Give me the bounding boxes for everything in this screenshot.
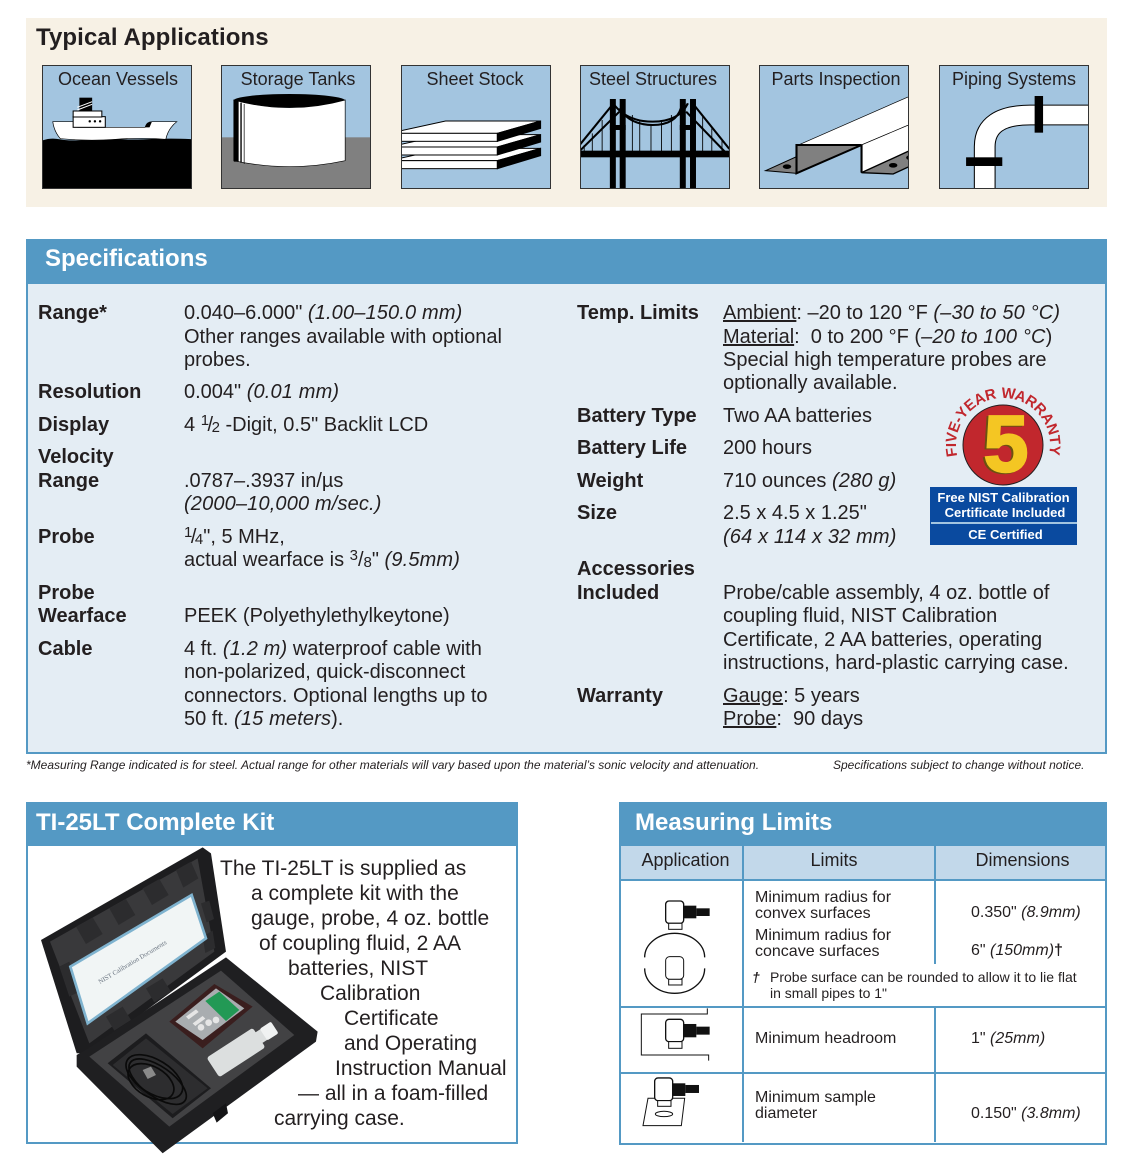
text: kit description: The TI-25LT is supplied as — [220, 857, 466, 880]
spec: range: probes. — [184, 349, 251, 371]
badge: NIST calibration and CE certified — [930, 487, 1077, 545]
spec: cable: connectors. Optional lengths up to — [184, 685, 488, 707]
photo: carrying case with gauge — [41, 847, 318, 1154]
spec: temp limits — [577, 302, 1060, 394]
spec: temp limits: Special high temperature probes are — [723, 349, 1047, 371]
panel: typical applications — [26, 18, 1107, 207]
tile: steel structures — [580, 65, 730, 189]
heading: measuring limits: Measuring Limits — [635, 809, 832, 836]
badge: NIST calibration and CE certified: CE Certified — [968, 527, 1043, 542]
dimension: sample diameter: 0.150" (3.8mm) — [971, 1105, 1081, 1122]
tile: steel structures: Steel Structures — [589, 69, 717, 89]
spec: resolution — [38, 381, 339, 403]
spec: cable: non-polarized, quick-disconnect — [184, 661, 465, 683]
spec: probe — [38, 524, 460, 571]
limit: sample diameter — [755, 1089, 876, 1122]
photo: carrying case with gauge: NIST Calibration Documents — [97, 939, 168, 986]
spec: range: Range* — [38, 302, 107, 324]
dimension: convex: 0.350" (8.9mm) — [971, 904, 1081, 921]
spec: warranty — [577, 685, 863, 730]
footnote: measuring range: *Measuring Range indicated is for steel. Actual range for other materials will vary based upon the material’s sonic velocity and attenuation. — [26, 758, 759, 772]
spec: battery life — [577, 437, 812, 459]
spec: temp limits: Temp. Limits — [577, 302, 699, 324]
panel: complete kit — [26, 802, 518, 1144]
spec: size: Size — [577, 502, 617, 524]
tile: ocean vessels: Ocean Vessels — [58, 69, 178, 89]
spec: temp limits: optionally available. — [723, 372, 898, 394]
limit: radius text: Minimum radius for — [755, 927, 891, 944]
spec: accessories included: Included — [577, 582, 659, 604]
tile: piping systems — [939, 65, 1089, 189]
spec: temp limits: Ambient: –20 to 120 °F (–30 to 50 °C) — [723, 302, 1060, 324]
heading: specifications: Specifications — [45, 245, 208, 272]
badge: NIST calibration and CE certified: Certificate Included — [945, 505, 1065, 520]
spec: velocity range — [38, 446, 382, 515]
badge: five-year warranty: 5 — [984, 399, 1028, 488]
spec: velocity range: Velocity — [38, 446, 114, 468]
spec: warranty: Warranty — [577, 685, 663, 707]
limit: sample diameter: diameter — [755, 1105, 817, 1122]
specifications header bar — [26, 239, 1107, 284]
tile: storage tanks: Storage Tanks — [241, 69, 355, 89]
tile: sheet stock: Sheet Stock — [426, 69, 524, 89]
spec: cable: Cable — [38, 638, 92, 660]
tile: parts inspection: Parts Inspection — [771, 69, 901, 89]
spec: range: Other ranges available with optional — [184, 326, 502, 348]
spec: size — [577, 502, 897, 548]
spec: probe: 1/4", 5 MHz, — [184, 524, 285, 548]
limit: sample diameter: Minimum sample — [755, 1089, 876, 1106]
spec: battery type: Battery Type — [577, 405, 697, 427]
footnote: subject to change: Specifications subject to change without notice. — [833, 758, 1084, 772]
spec: accessories included: Certificate, 2 AA batteries, operating — [723, 629, 1042, 651]
icon: headroom probe — [640, 1008, 710, 1061]
spec: cable: 50 ft. (15 meters). — [184, 708, 343, 730]
table header row — [621, 846, 1105, 880]
dimension: headroom: 1" (25mm) — [971, 1030, 1045, 1047]
spec: display — [38, 412, 428, 436]
spec: temp limits: Material: 0 to 200 °F (–20 to 100 °C) — [723, 326, 1052, 348]
text: kit description: a complete kit with the — [251, 882, 459, 905]
spec: cable: 4 ft. (1.2 m) waterproof cable with — [184, 638, 482, 660]
spec: velocity range: (2000–10,000 m/sec.) — [184, 493, 382, 515]
spec: accessories included: coupling fluid, NIST Calibration — [723, 605, 997, 627]
spec: velocity range: Range — [38, 470, 99, 492]
spec: probe wearface: PEEK (Polyethylethylkeytone) — [184, 605, 450, 627]
spec: display: 4 1/2 -Digit, 0.5" Backlit LCD — [184, 412, 428, 436]
panel: specifications — [26, 239, 1107, 754]
badge: NIST calibration and CE certified: Free NIST Calibration — [937, 490, 1070, 505]
tile: piping systems: Piping Systems — [952, 69, 1076, 89]
spec: accessories included: Probe/cable assembly, 4 oz. bottle of — [723, 582, 1049, 604]
spec: battery life: Battery Life — [577, 437, 687, 459]
spec: resolution: Resolution — [38, 381, 141, 403]
note: probe surface: in small pipes to 1" — [770, 985, 887, 1001]
measuring limits header bar — [619, 802, 1107, 846]
badge: five-year warranty — [946, 387, 1060, 488]
limit: radius text: concave surfaces — [755, 943, 880, 960]
tile: parts inspection — [759, 65, 909, 189]
spec: warranty: Probe: 90 days — [723, 708, 863, 730]
spec: probe wearface: Probe — [38, 582, 95, 604]
heading: typical applications: Typical Applications — [36, 24, 269, 51]
text: kit description: Certificate — [344, 1007, 439, 1030]
text: kit description: Calibration — [320, 982, 420, 1005]
spec: velocity range: .0787–.3937 in/µs — [184, 470, 343, 492]
text: kit description: and Operating — [344, 1032, 477, 1055]
spec: warranty: Gauge: 5 years — [723, 685, 860, 707]
text: kit description: batteries, NIST — [288, 957, 428, 980]
spec: weight: 710 ounces (280 g) — [723, 470, 896, 492]
spec: probe wearface: Wearface — [38, 605, 127, 627]
text: kit description: carrying case. — [274, 1107, 405, 1130]
text: kit description: Instruction Manual — [335, 1057, 507, 1080]
spec: cable — [38, 638, 488, 730]
spec: probe: actual wearface is 3/8" (9.5mm) — [184, 547, 460, 571]
spec: resolution: 0.004" (0.01 mm) — [184, 381, 339, 403]
spec: weight: Weight — [577, 470, 643, 492]
limit: radius text: convex surfaces — [755, 905, 871, 922]
spec: range: 0.040–6.000" (1.00–150.0 mm) — [184, 302, 462, 324]
limit: headroom: Minimum headroom — [755, 1030, 896, 1047]
limit: radius text — [755, 889, 891, 960]
spec: display: Display — [38, 414, 109, 436]
heading: complete kit: TI-25LT Complete Kit — [36, 809, 274, 836]
badge: five-year warranty: FIVE-YEAR WARRANTY — [946, 387, 1060, 457]
dimension: concave: 6" (150mm)† — [971, 942, 1063, 959]
tile: ocean vessels — [42, 65, 192, 189]
spec: accessories included — [577, 558, 1069, 674]
spec: size: 2.5 x 4.5 x 1.25" — [723, 502, 867, 524]
spec: probe: Probe — [38, 526, 95, 548]
tile: sheet stock — [401, 65, 551, 189]
text: kit description: gauge, probe, 4 oz. bottle — [251, 907, 489, 930]
spec: accessories included: instructions, hard-plastic carrying case. — [723, 652, 1069, 674]
panel: measuring limits — [619, 802, 1107, 1145]
text: kit description: — all in a foam-filled — [298, 1082, 488, 1105]
spec: weight — [577, 470, 896, 492]
spec: probe wearface — [38, 582, 450, 627]
column: limits: Limits — [810, 850, 858, 870]
spec: battery type — [577, 405, 872, 427]
spec: size: (64 x 114 x 32 mm) — [723, 526, 897, 548]
note: probe surface: † — [752, 969, 760, 985]
spec: accessories included: Accessories — [577, 558, 695, 580]
limit: radius text: Minimum radius for — [755, 889, 891, 906]
spec: battery life: 200 hours — [723, 437, 812, 459]
kit header bar — [26, 802, 518, 846]
column: dimensions: Dimensions — [975, 850, 1070, 870]
icon: sample diameter probe — [642, 1077, 699, 1126]
icon: convex and concave probes — [644, 900, 710, 994]
note: probe surface — [752, 969, 1077, 1001]
note: probe surface: Probe surface can be rounded to allow it to lie flat — [770, 969, 1077, 985]
column: application: Application — [641, 850, 730, 870]
spec: range — [38, 302, 502, 371]
text: kit description: of coupling fluid, 2 AA — [259, 932, 461, 955]
tile: storage tanks — [221, 65, 371, 189]
spec: battery type: Two AA batteries — [723, 405, 872, 427]
text: kit description — [220, 857, 507, 1130]
